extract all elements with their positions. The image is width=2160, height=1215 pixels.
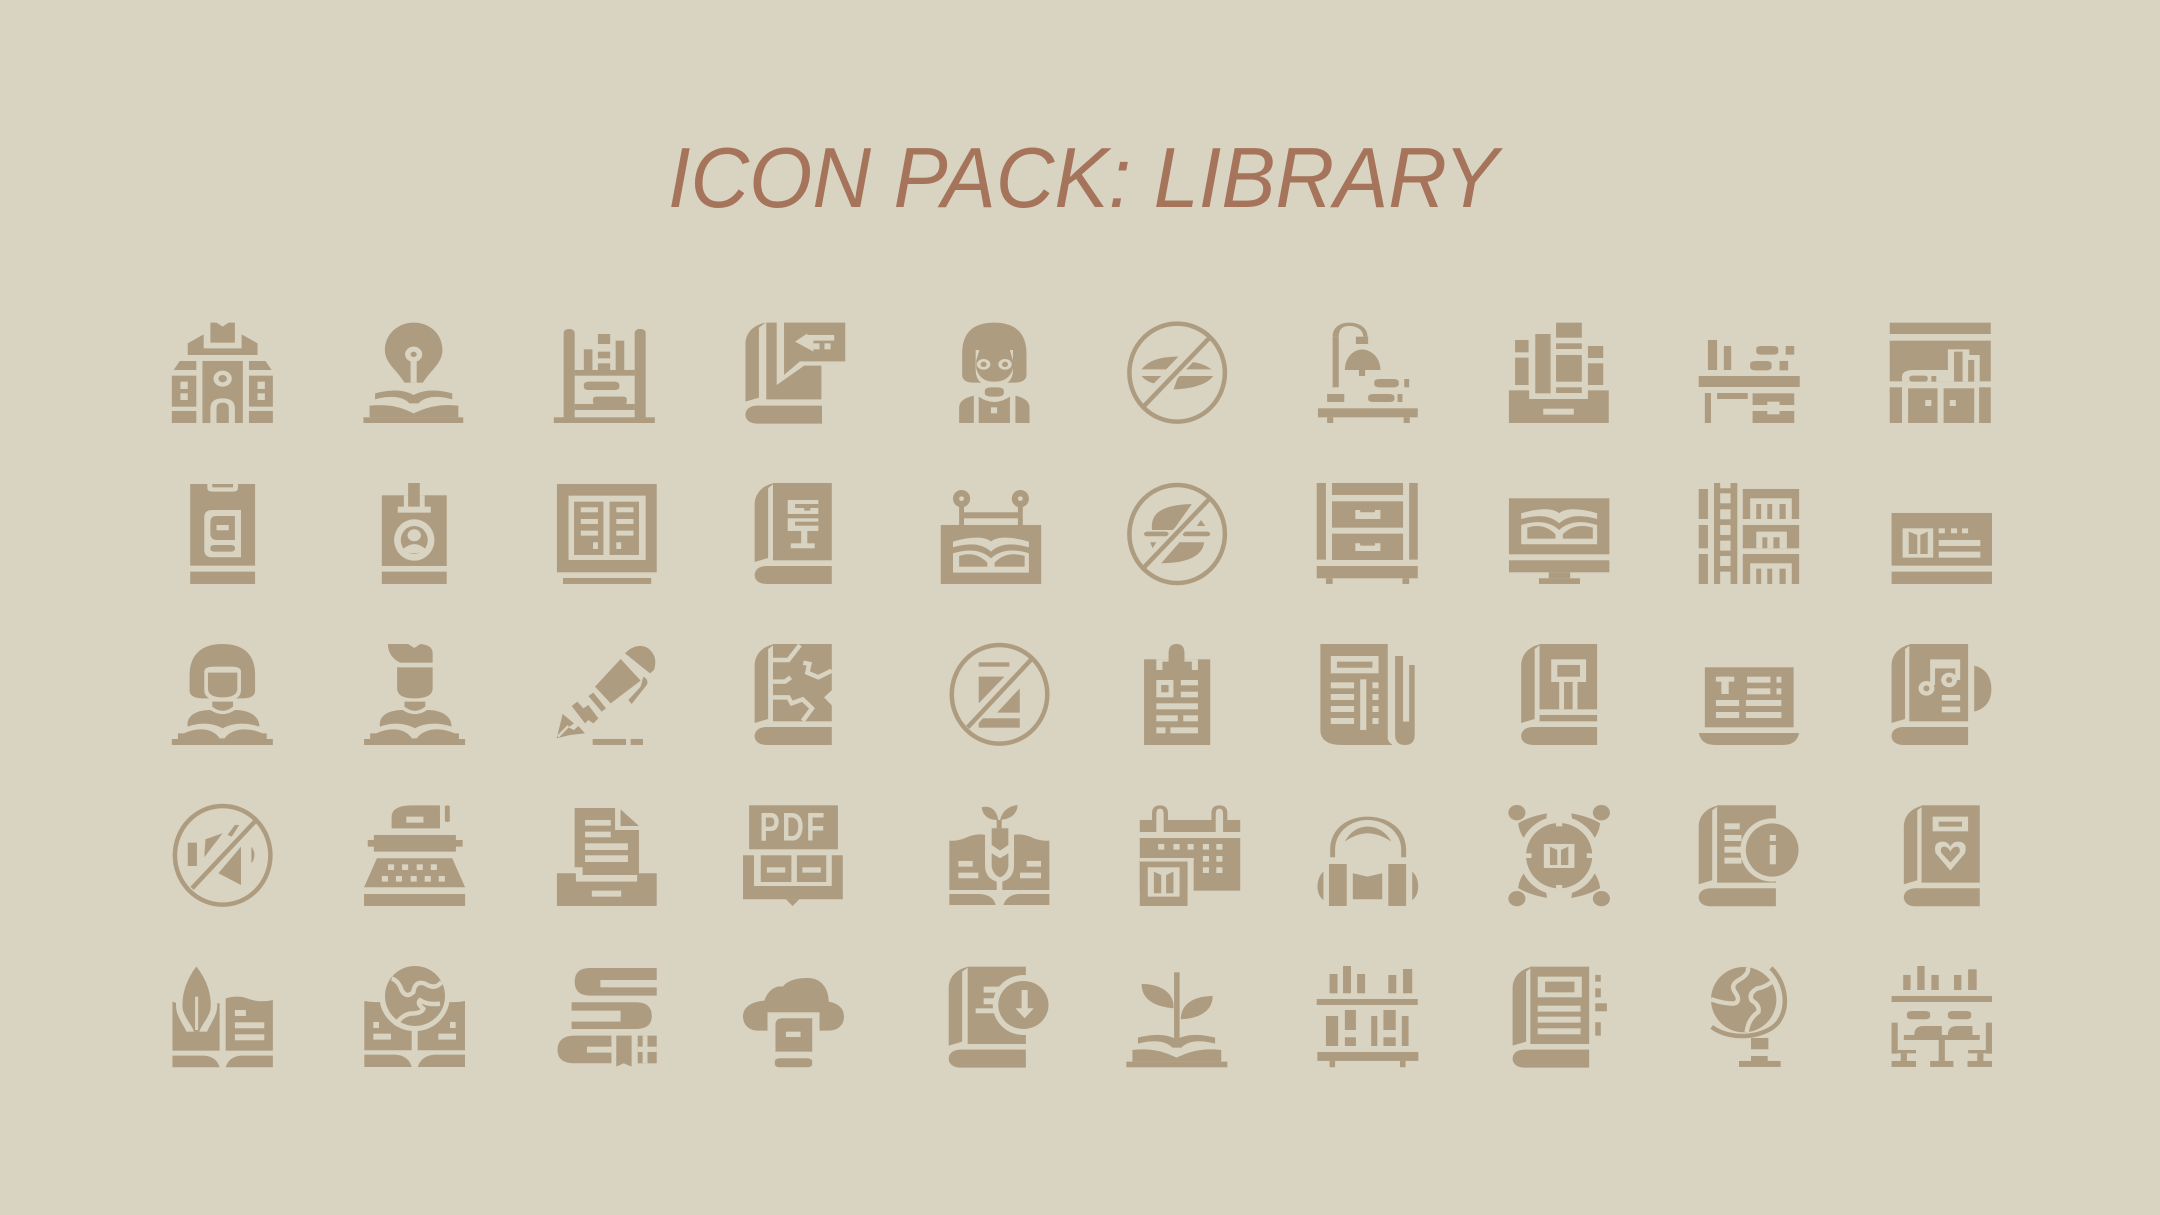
icon: study desk xyxy=(1699,340,1800,423)
icon group: rows 1-2, columns 1-5 xyxy=(172,323,1041,584)
icon: desk globe xyxy=(1711,967,1785,1067)
icon: librarian woman xyxy=(959,323,1030,423)
icon: book with speech bubble xyxy=(745,323,845,424)
icon: woman reading xyxy=(172,644,273,745)
icon: book info xyxy=(1699,805,1804,906)
icon: no food sign xyxy=(1129,324,1225,422)
icon: book catalogue tablet xyxy=(1892,513,1992,584)
icon: book with flowchart xyxy=(755,483,832,584)
icon: plant growing from book xyxy=(1126,972,1227,1067)
icon: bookshelf xyxy=(554,329,655,423)
icon: globe over open book xyxy=(364,966,465,1067)
icon: bookshelf table xyxy=(1317,966,1418,1067)
icon: PDF book: PDF xyxy=(759,805,827,850)
icon: no document sign xyxy=(952,645,1047,744)
icon: clipboard xyxy=(1144,644,1210,745)
icon: ID badge xyxy=(382,483,447,584)
icon: book catalogue with tabs xyxy=(1513,967,1607,1068)
icon group: rows 3-4, columns 6-10 xyxy=(1140,644,1991,906)
icon group: rows 1-2, columns 6-10 xyxy=(1129,323,1992,584)
icon: audiobook headphones xyxy=(1317,817,1418,906)
icon: calendar with book xyxy=(1140,805,1240,906)
icon group: row 5, columns 6-10 xyxy=(1126,966,1992,1068)
icon: PDF book xyxy=(743,805,843,906)
icon: fountain pen xyxy=(557,646,655,745)
icon: newspaper xyxy=(1320,644,1415,745)
icon: open book frame xyxy=(557,484,657,584)
icon: typewriter xyxy=(364,805,465,906)
icon: desk lamp with books xyxy=(1318,323,1418,423)
icon: quill and open book xyxy=(172,962,273,1067)
icon: e-book monitor xyxy=(1509,498,1609,584)
icon: ladder and shelves xyxy=(1699,477,1799,584)
icon: books in drawer xyxy=(1509,323,1609,423)
icon: library building xyxy=(172,323,273,423)
icon: no speaker sign xyxy=(175,806,270,905)
icon: no eating sign xyxy=(1129,485,1225,583)
icon: favorite book heart xyxy=(1904,805,1980,906)
icon: music book xyxy=(1892,644,1991,745)
icon: hanging book sign xyxy=(941,490,1041,584)
icon group: row 5, columns 1-5 xyxy=(172,962,1054,1068)
icon: book club gear xyxy=(1508,805,1610,906)
icon: book with sign xyxy=(1521,644,1597,745)
icon group: rows 3-4, columns 1-5 xyxy=(172,644,1049,906)
icon: stack of books xyxy=(558,968,657,1067)
icon: filing cabinet xyxy=(1317,483,1418,584)
icon: cabinet with books xyxy=(1890,323,1991,423)
title: ICON PACK: LIBRARY xyxy=(668,131,1503,226)
icon: book with map xyxy=(755,644,832,745)
icon: laptop with text xyxy=(1699,667,1799,745)
icon: book download xyxy=(949,967,1054,1068)
icon: reading table and chairs xyxy=(1892,966,1992,1067)
icon: document in drawer xyxy=(557,808,657,906)
icon: sprouting pen and book xyxy=(949,805,1049,905)
icon: library card xyxy=(190,484,255,584)
icon grid xyxy=(172,323,1992,1068)
icon: light bulb over book xyxy=(363,323,463,423)
icon: man reading xyxy=(364,644,465,745)
icon: cloud book xyxy=(743,978,844,1067)
